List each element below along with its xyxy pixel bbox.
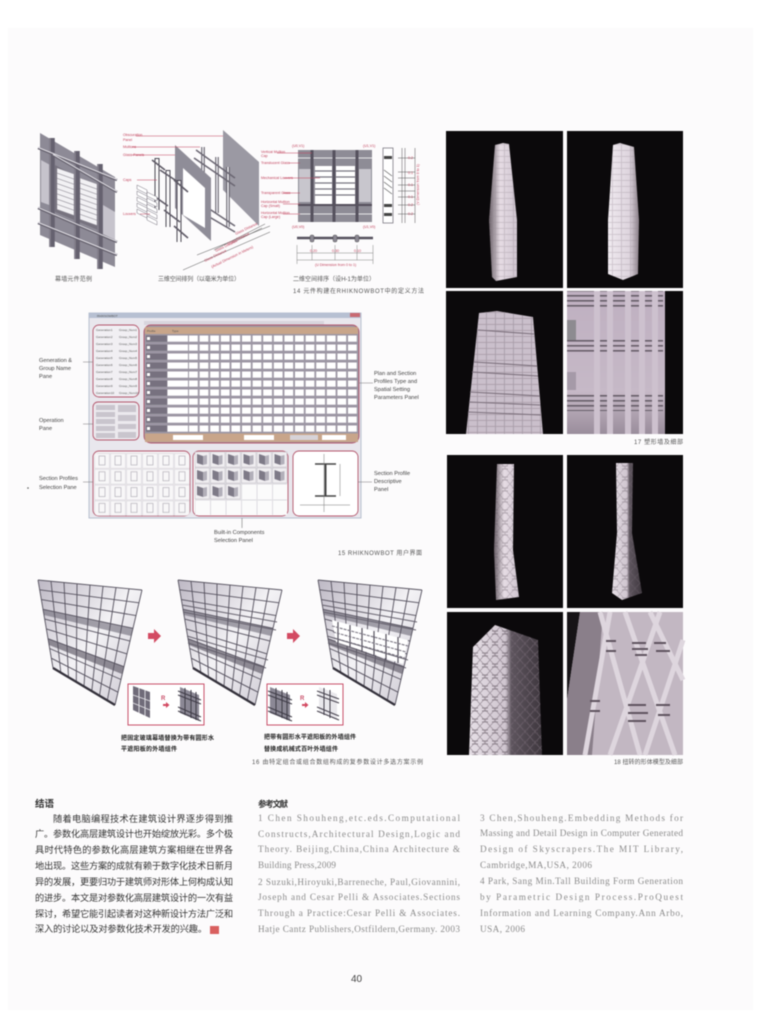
- pane labels: [27, 358, 419, 544]
- pane labels: Section Profile: [374, 471, 410, 477]
- references column 2: Massing and Detail Design in Computer Generated: [480, 828, 683, 838]
- figure 14 captions: 幕墙元件范例: [55, 275, 92, 283]
- 2D elevation: Cap (Large): [261, 215, 280, 219]
- pane labels: Operation: [39, 418, 64, 424]
- generation and group name pane: Group_Num6: [119, 363, 137, 367]
- pane labels: Selection Pane: [39, 485, 77, 491]
- plan with U dimensions: 0.20: [310, 249, 317, 253]
- figure 16 notes: 把固定玻璃幕墙替换为带有圆形水: [121, 734, 214, 742]
- twisted tower view 1: [447, 455, 563, 608]
- generation and group name pane: Group_Num1: [119, 328, 137, 332]
- application window: [89, 313, 361, 518]
- 2D elevation: Mechanical Louvers: [261, 176, 293, 180]
- figure 16 notes: 替换成机械式百叶外墙组件: [264, 745, 338, 753]
- references column 1: 1 Chen Shouheng,etc.eds.Computational: [258, 813, 460, 823]
- conclusion text: [35, 798, 233, 934]
- leader lines: [83, 362, 373, 528]
- section and V dimensions: (V Dimension from 0 to 1): [416, 164, 420, 205]
- conclusion paragraph: 异的发展，更要归功于建筑师对形体上何构成认知: [35, 876, 233, 887]
- pane labels: Panel: [374, 487, 388, 493]
- plan and section parameters table: Profile: [147, 329, 156, 333]
- figure 16 notes: 把带有圆形水平遮阳板的外墙组件: [264, 733, 356, 741]
- red labels: Caps: [123, 178, 132, 182]
- figure 14 captions: 三维空间排列（以毫米为单位）: [158, 275, 240, 283]
- figure 17: tapered tower model and details: [446, 131, 683, 446]
- exploded 3D arrangement: [123, 130, 270, 270]
- references column 2: Design of Skyscrapers.The MIT Library,: [480, 844, 683, 854]
- 2D elevation: (U1,V0): [363, 225, 375, 229]
- pane labels: Plan and Section: [374, 371, 416, 377]
- plan with U dimensions: 0.10: [354, 249, 361, 253]
- arrow 1: [148, 629, 161, 643]
- generation and group name pane: Group_Num10: [119, 391, 139, 395]
- 2D elevation: Vertical Mullion: [261, 150, 285, 154]
- pane labels: Profiles Type and: [374, 379, 417, 385]
- red labels: Louvers: [123, 212, 136, 216]
- generation and group name pane: Generation8: [96, 377, 113, 381]
- generation and group name pane: Group_Num2: [119, 335, 137, 339]
- references column 1: Through a Practice:Cesar Pelli & Associates.: [258, 908, 460, 918]
- twisted tower view 2: [567, 455, 683, 608]
- 2D elevation: (U1,V1): [363, 144, 375, 148]
- plan with U dimensions: (U Dimension from 0 to 1): [315, 263, 356, 267]
- inset box: rod to louvre facade: [267, 684, 343, 725]
- red labels: Obscuration: [123, 133, 142, 137]
- tower view 1: [446, 131, 563, 288]
- generation and group name pane: Group_Num9: [119, 384, 137, 388]
- generation and group name pane: Generation9: [96, 384, 113, 388]
- figure 14 captions: 14 元件构建在RHIKNOWBOT中的定义方法: [293, 287, 424, 295]
- plan with U dimensions: 0.30: [332, 249, 339, 253]
- figure 16 notes: 平遮阳板的外墙组件: [121, 745, 177, 753]
- pane labels: Built-in Components: [214, 530, 265, 536]
- dimension lines: (Actual Dimension in Meters): [211, 245, 254, 269]
- references column 2: [480, 813, 683, 934]
- plan with U dimensions: [297, 235, 373, 267]
- 2D elevation: Horizontal Mullion: [261, 211, 290, 215]
- conclusion paragraph: [35, 813, 233, 934]
- figure 18 caption: 18 扭转的形体模型及细部: [614, 758, 683, 766]
- generation and group name pane: Generation2: [96, 335, 113, 339]
- section and V dimensions: 0.1: [408, 195, 413, 199]
- figure 14 captions: 二维空间排序（设H-1为单位）: [293, 275, 375, 283]
- 2D elevation: (U0,V1): [292, 144, 304, 148]
- 2D elevation: Transparent Glass: [261, 191, 291, 195]
- dimension lines: [183, 222, 270, 270]
- section and V dimensions: 0.1: [408, 171, 413, 175]
- section and V dimensions: 0.2: [408, 156, 413, 160]
- pane labels: Generation &: [39, 358, 72, 364]
- dimension lines: Glass Distance: [204, 249, 227, 263]
- references column 1: Constructs,Architectural Design,Logic and: [258, 829, 460, 839]
- application window: RHIKNOWBOT: [97, 314, 118, 318]
- pane labels: Spatial Setting: [374, 387, 410, 393]
- conclusion paragraph: 深入的讨论以及对参数化技术开发的兴趣。: [35, 923, 207, 934]
- pane labels: Descriptive: [374, 479, 402, 485]
- conclusion paragraph: 探讨，希望它能引起读者对这种新设计方法广泛和: [35, 908, 233, 919]
- dimension lines: Glass Distance: [215, 239, 238, 253]
- conclusion paragraph: 地出现。这些方案的成就有赖于数字化技术日新月: [35, 860, 233, 871]
- references column 2: Cambridge,MA,USA, 2006: [480, 860, 592, 870]
- references: [258, 799, 683, 934]
- generation and group name pane: Group_Num8: [119, 377, 137, 381]
- figure 16 notes: [121, 733, 356, 753]
- generation and group name pane: Generation3: [96, 342, 113, 346]
- figure 15 caption: 15 RHIKNOWBOT 用户界面: [338, 549, 422, 557]
- tower view 3: [446, 291, 563, 434]
- plan and section parameters table: [144, 325, 359, 443]
- 2D elevation: Translucent Glass: [261, 161, 290, 165]
- red labels: Panel: [123, 138, 132, 142]
- references column 1: [258, 813, 460, 934]
- references column 1: Theory. Beijing,China,China Architecture &: [258, 844, 460, 854]
- figure 16 caption: 16 由特定组合或组合数组构成的复参数设计多选方案示例: [252, 758, 423, 766]
- references heading: 参考文献: [258, 799, 288, 809]
- conclusion paragraph: 随着电脑编程技术在建筑设计界逐步得到推: [53, 813, 233, 824]
- dimension lines: Glass Distance: [227, 232, 250, 246]
- generation and group name pane: Group_Num7: [119, 370, 137, 374]
- conclusion paragraph: 广。参数化高层建筑设计也开始绽放光彩。多个极: [35, 828, 233, 839]
- generation and group name pane: Generation7: [96, 370, 113, 374]
- references column 1: 2 Suzuki,Hiroyuki,Barreneche, Paul,Giovannini,: [258, 877, 460, 887]
- figure 15: RHIKNOWBOT user interface: [27, 313, 422, 557]
- dimension lines: Glass Distance: [235, 222, 258, 236]
- end mark: [210, 926, 219, 934]
- inset box: glass to rod facade: [128, 684, 204, 725]
- conclusion paragraph: 具时代特色的参数化高层建筑方案相继在世界各: [35, 844, 233, 855]
- pane labels: Pane: [39, 374, 52, 380]
- figure 18: twisted tower model and details: [447, 455, 683, 766]
- generation and group name pane: Generation4: [96, 349, 113, 353]
- generation and group name pane: Group_Num5: [119, 356, 137, 360]
- references column 1: Hatje Cantz Publishers,Ostfildern,Germany. 2003: [258, 924, 460, 934]
- tower detail: [567, 291, 683, 434]
- red labels: Glass Panels: [123, 153, 144, 157]
- conclusion heading: 结语: [35, 798, 55, 810]
- 2D elevation: [261, 144, 375, 229]
- twisted tower detail: [567, 612, 683, 755]
- pane labels: Parameters Panel: [374, 395, 419, 401]
- references column 2: 4 Park, Sang Min.Tall Building Form Generation: [480, 876, 683, 886]
- figure 16: multi-scheme facade examples: [38, 580, 423, 766]
- references column 1: Building Press,2009: [258, 860, 336, 870]
- arrow 2: [287, 629, 300, 643]
- tower view 2: [567, 131, 683, 288]
- twisted tower view 3: [447, 612, 563, 755]
- generation and group name pane: Group_Num4: [119, 349, 137, 353]
- generation and group name pane: Generation6: [96, 363, 113, 367]
- generation and group name pane: Generation5: [96, 356, 113, 360]
- 2D elevation: Cap: [261, 154, 268, 158]
- pane labels: Selection Panel: [214, 538, 253, 544]
- 2D elevation: Cap (Small): [261, 204, 280, 208]
- operation pane: [93, 402, 139, 440]
- section and V dimensions: [383, 148, 420, 223]
- references column 2: Information and Learning Company.Ann Arbo,: [480, 908, 683, 918]
- 2D elevation: Horizontal Mullion: [261, 200, 290, 204]
- references column 1: Joseph and Cesar Pelli & Associates.Sections: [258, 892, 460, 902]
- red labels: [123, 133, 144, 216]
- page number: 40: [351, 974, 363, 985]
- facade variant 3: [318, 580, 422, 705]
- figure 14 captions: [55, 275, 424, 295]
- references column 2: 3 Chen,Shouheng.Embedding Methods for: [480, 813, 683, 823]
- pane labels: Group Name: [39, 366, 71, 372]
- built-in components selection pane: [193, 451, 288, 516]
- red labels: Mullions: [123, 145, 136, 149]
- references column 2: by Parametric Design Process.ProQuest: [480, 892, 683, 902]
- generation and group name pane: Generation10: [96, 391, 115, 395]
- plan and section parameters table: Type: [172, 329, 179, 333]
- 2D elevation: (U0,V0): [292, 225, 304, 229]
- facade variant 2: [178, 580, 282, 705]
- inset box: rod to louvre facade: R: [300, 696, 305, 702]
- generation and group name pane: Generation1: [96, 328, 113, 332]
- conclusion paragraph: 的进步。本文是对参数化高层建筑设计的一次有益: [35, 892, 233, 903]
- section and V dimensions: 0.1: [408, 183, 413, 187]
- pane labels: Pane: [39, 426, 52, 432]
- inset box: glass to rod facade: R: [161, 696, 166, 702]
- figure 17 caption: 17 塑形墙及细部: [634, 438, 683, 446]
- references column 2: USA, 2006: [480, 924, 525, 934]
- section and V dimensions: 0.2: [408, 203, 413, 207]
- pane labels: Section Profiles: [39, 476, 78, 482]
- figure 14: curtain wall component definition: [38, 130, 424, 295]
- facade component perspective: [38, 133, 117, 269]
- section profile selection pane: [93, 451, 190, 516]
- facade variant 1: [38, 580, 142, 705]
- section and V dimensions: 0.2: [408, 212, 413, 216]
- generation and group name pane: [93, 325, 139, 397]
- generation and group name pane: Group_Num3: [119, 342, 137, 346]
- section profile descriptive pane: [293, 451, 358, 516]
